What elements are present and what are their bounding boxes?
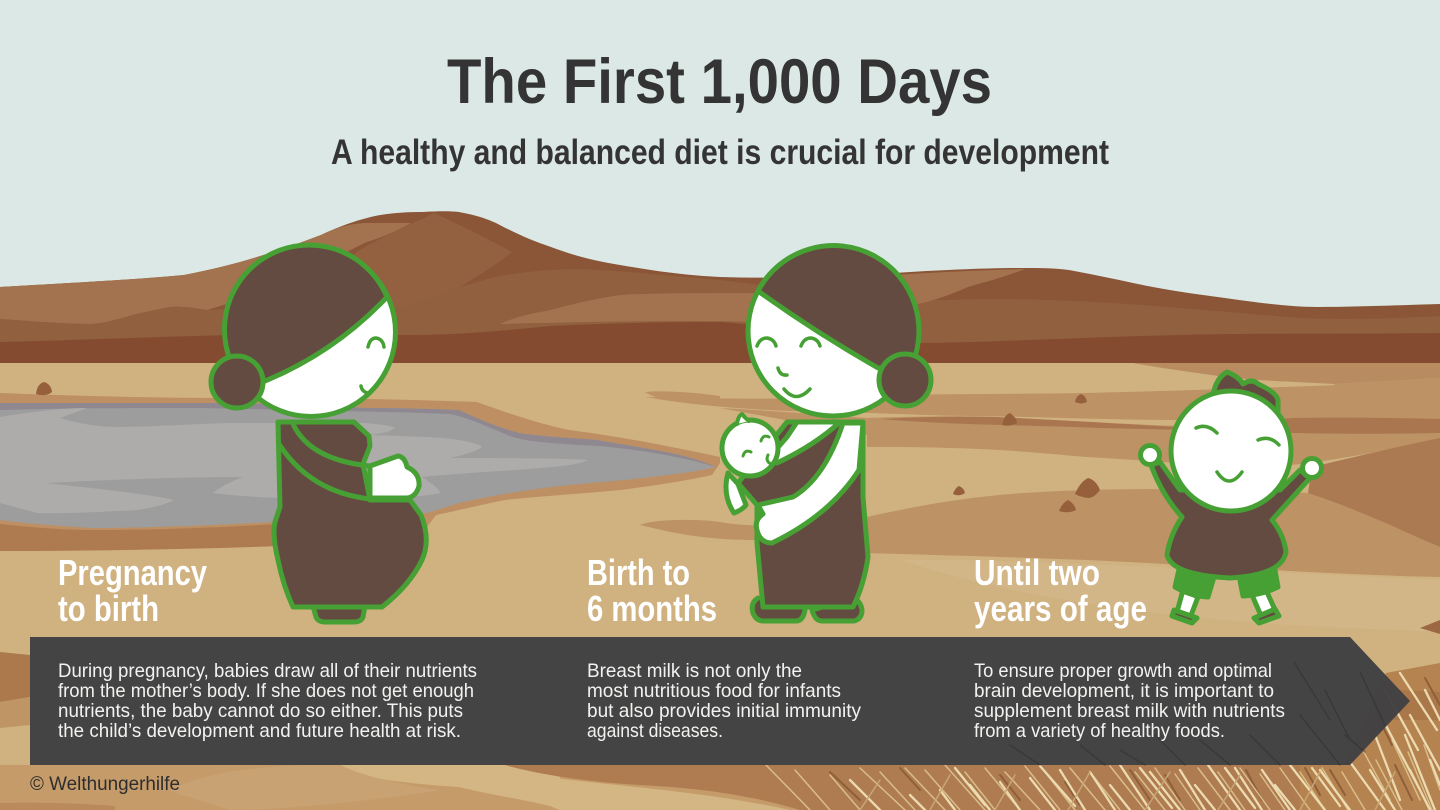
hands — [1140, 446, 1160, 464]
stage 3 text: from a variety of healthy foods. — [974, 720, 1225, 742]
holding arm — [756, 423, 863, 543]
stage 2 text: Breast milk is not only the — [587, 660, 802, 682]
feet — [1172, 609, 1279, 623]
stage 2 text — [587, 660, 861, 742]
stage 3 text — [974, 660, 1285, 742]
stage 1 text: nutrients, the baby cannot do so either. This puts — [58, 700, 463, 722]
title: The First 1,000 Days — [447, 47, 992, 117]
foot — [313, 606, 365, 622]
stage 1 text: During pregnancy, babies draw all of their nutrients — [58, 660, 477, 682]
dress — [738, 422, 868, 607]
bun — [211, 356, 263, 408]
left leg — [1177, 590, 1198, 618]
arm — [279, 424, 370, 499]
dry grass — [766, 673, 1440, 810]
baby limb — [726, 473, 746, 513]
body and belly — [274, 422, 426, 607]
right leg — [1252, 590, 1276, 618]
stage 3 heading — [974, 552, 1147, 629]
grass seen through band — [1010, 662, 1385, 765]
stage 2 text: most nutritious food for infants — [587, 680, 841, 702]
stage 3 text: supplement breast milk with nutrients — [974, 700, 1285, 722]
head — [226, 248, 396, 416]
stage 1 text — [58, 660, 477, 742]
stage 2 text: against diseases. — [587, 720, 723, 742]
stage 3 text: brain development, it is important to — [974, 680, 1274, 702]
arm strap — [772, 422, 840, 463]
stage 2 heading: Birth to — [587, 552, 690, 593]
face — [1196, 426, 1279, 481]
stage 2 heading: 6 months — [587, 588, 717, 629]
stage 2 text: but also provides initial immunity — [587, 700, 861, 722]
(lower ground) — [0, 635, 1440, 810]
stage 1 heading — [58, 552, 207, 629]
head — [1171, 391, 1291, 511]
bun — [879, 354, 931, 406]
figure: breastfeeding mother — [722, 246, 931, 621]
head — [748, 246, 918, 416]
shorts — [1175, 565, 1278, 597]
hand — [370, 456, 419, 498]
rocks — [36, 382, 1100, 512]
stage 1 heading: Pregnancy — [58, 552, 207, 593]
subtitle: A healthy and balanced diet is crucial for development — [331, 133, 1109, 172]
baby face — [743, 436, 771, 464]
stage 2 heading — [587, 552, 717, 629]
hair — [225, 245, 387, 390]
baby head — [722, 420, 778, 476]
hair — [1213, 372, 1278, 416]
shirt and arms — [1151, 462, 1310, 578]
figure: pregnant mother — [211, 245, 426, 622]
figure: toddler — [1140, 372, 1322, 623]
hair — [758, 246, 919, 371]
stage 3 heading: Until two — [974, 552, 1100, 593]
pond — [0, 393, 720, 551]
feet — [752, 598, 862, 621]
stage 1 heading: to birth — [58, 588, 159, 629]
baby tuft — [737, 414, 749, 424]
face — [757, 338, 820, 396]
info arrow band — [30, 637, 1410, 765]
stage 3 heading: years of age — [974, 588, 1147, 629]
stage 3 text: To ensure proper growth and optimal — [974, 660, 1272, 682]
credit: © Welthungerhilfe — [30, 773, 180, 795]
stage 1 text: from the mother’s body. If she does not get enough — [58, 680, 474, 702]
eye and mouth — [361, 338, 384, 393]
stage 1 text: the child’s development and future health at risk. — [58, 720, 461, 742]
